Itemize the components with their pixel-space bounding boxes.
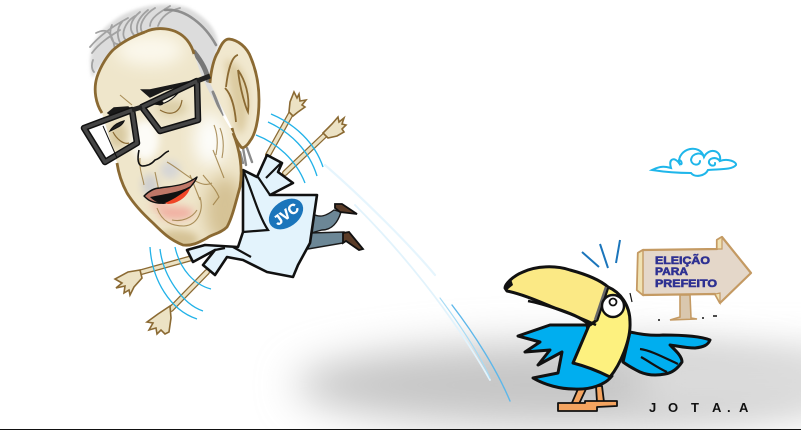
shoe lower bbox=[343, 232, 363, 250]
jet trail bbox=[325, 165, 510, 401]
eyebrows bbox=[108, 80, 197, 116]
logo: JVC: JVC bbox=[270, 200, 302, 228]
ground shadow bbox=[0, 343, 801, 430]
hand bbox=[289, 92, 306, 116]
sign text: ELEIÇÃO bbox=[655, 254, 710, 267]
ground specks bbox=[658, 316, 717, 320]
arrow board bbox=[637, 237, 751, 303]
post bbox=[670, 295, 697, 320]
arm: upper left bbox=[268, 92, 306, 155]
legs and shoes bbox=[308, 204, 363, 250]
eye left bbox=[110, 121, 129, 143]
left wing and body bbox=[518, 325, 612, 389]
hand bbox=[147, 306, 171, 334]
glasses bbox=[84, 76, 210, 162]
right wing bbox=[623, 332, 710, 375]
wrinkles bbox=[120, 95, 224, 226]
shoe upper bbox=[335, 204, 357, 214]
legs bbox=[558, 386, 617, 411]
motion arcs bbox=[150, 114, 323, 319]
hand bbox=[115, 270, 142, 295]
sign text bbox=[655, 254, 717, 290]
hand bbox=[323, 117, 346, 138]
sign: Eleição para prefeito bbox=[637, 237, 751, 320]
nose bbox=[138, 150, 169, 166]
face bbox=[84, 29, 245, 250]
arm: lower left bbox=[115, 258, 192, 295]
cloud bbox=[652, 149, 736, 176]
eye bbox=[602, 295, 624, 317]
yellow neck and chest bbox=[573, 287, 630, 377]
shirt bbox=[187, 155, 317, 277]
beak bbox=[505, 267, 608, 325]
arm: lower right bbox=[147, 272, 207, 334]
signature: JOTA.A bbox=[649, 400, 749, 415]
ear bbox=[210, 39, 259, 148]
surprise marks bbox=[582, 240, 620, 268]
eye right bbox=[150, 93, 182, 113]
toucan bbox=[505, 240, 710, 411]
hair bbox=[90, 4, 252, 165]
mouth bbox=[144, 177, 197, 204]
sign text: PARA bbox=[655, 266, 688, 278]
sign text: PREFEITO bbox=[655, 278, 717, 290]
arm: upper right bbox=[285, 117, 346, 173]
